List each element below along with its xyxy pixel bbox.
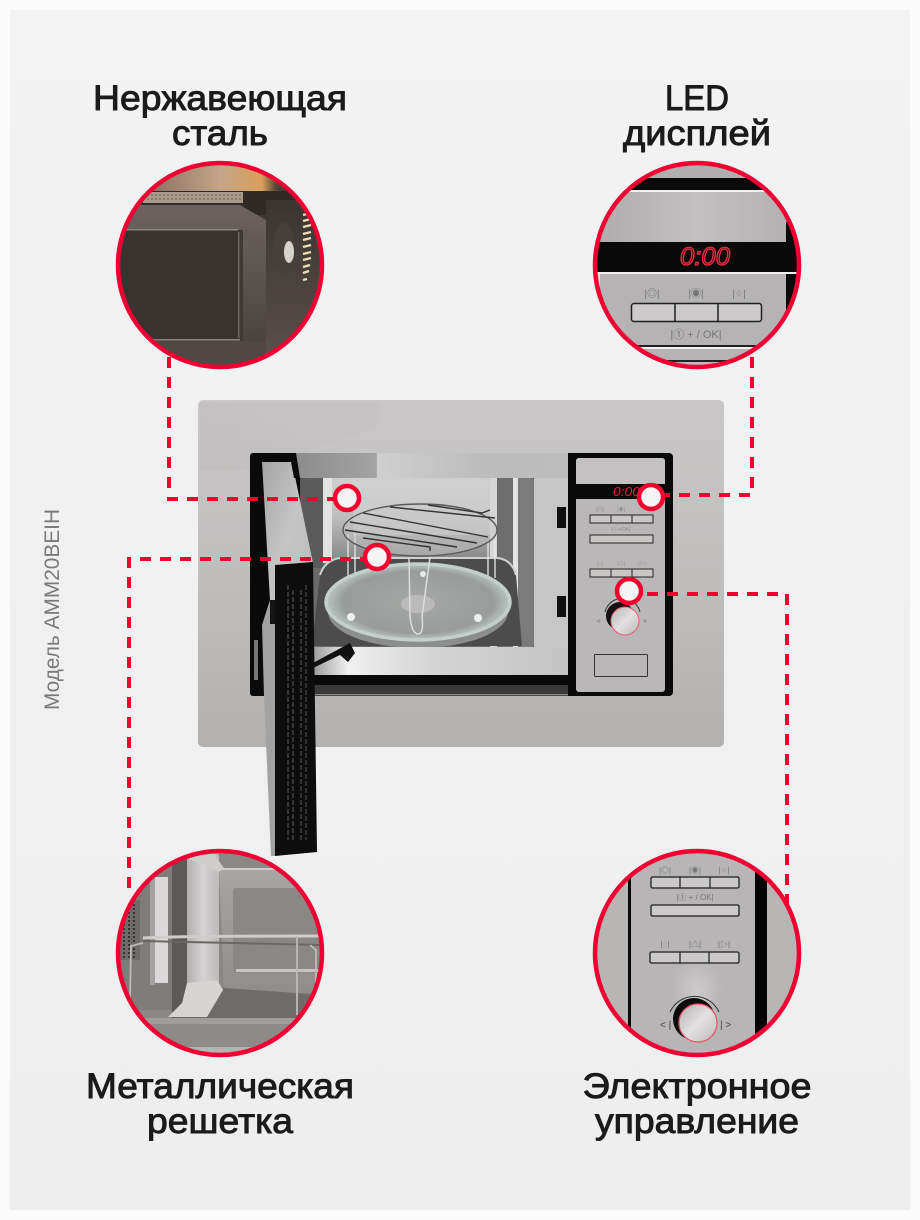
bright side wall <box>187 850 219 985</box>
marker: electronic control <box>617 579 641 603</box>
legends: |▷| <box>718 940 730 949</box>
back wall <box>332 478 494 558</box>
legends: |◉| <box>689 866 701 875</box>
button legends: |① + / OK| <box>670 328 722 341</box>
control buttons: |▷| <box>638 561 646 567</box>
open door <box>250 453 317 856</box>
knob: | > <box>720 1020 731 1031</box>
left wall <box>120 866 172 1010</box>
display digits: 0:00 <box>613 485 640 499</box>
control buttons: |△| <box>617 560 625 567</box>
legends: |① + / OK| <box>676 893 714 902</box>
door seal strip <box>275 562 317 856</box>
callout circle: metal rack <box>115 848 325 1058</box>
heading: stainless steel: сталь <box>172 113 268 153</box>
stainless frame <box>198 400 724 747</box>
heading: electronic control <box>582 1066 812 1141</box>
rack central support <box>409 557 430 634</box>
dial knob: > <box>643 619 647 625</box>
right wall strips <box>490 478 497 647</box>
oven door surround <box>290 453 568 696</box>
marker: LED display <box>639 485 663 509</box>
cavity floor <box>174 988 311 1018</box>
marker: metal rack <box>365 545 389 569</box>
heading: electronic control: Электронное <box>582 1066 812 1106</box>
control buttons: |①+/OK| <box>611 526 631 533</box>
control panel <box>575 458 665 692</box>
legends: |◌| <box>661 940 669 949</box>
tan top edge <box>153 165 283 191</box>
bright perforation <box>303 213 311 280</box>
upper slope <box>127 205 266 341</box>
control buttons: |◉| <box>617 507 625 513</box>
heading: electronic control: управление <box>595 1101 799 1141</box>
control buttons <box>590 507 653 577</box>
leader line: LED display <box>663 357 752 495</box>
knob: < | <box>660 1020 671 1031</box>
left wall strips <box>300 478 323 568</box>
heading: stainless steel: Нержавеющая <box>93 78 347 118</box>
heading: metal rack: решетка <box>147 1101 293 1141</box>
back wall <box>219 870 318 980</box>
heading: LED display: LED <box>665 78 729 118</box>
heading: LED display: дисплей <box>623 113 771 153</box>
knob <box>660 996 731 1042</box>
callout circle: LED display <box>590 160 806 370</box>
rack rear legs <box>348 534 495 582</box>
buttons <box>650 877 739 963</box>
main back wall <box>118 230 240 340</box>
callout circle: electronic control <box>590 848 804 1058</box>
legends: |△| <box>689 940 701 949</box>
callout circle: stainless steel interior <box>115 160 326 370</box>
leader line: stainless steel <box>169 357 335 499</box>
floor <box>312 558 522 646</box>
button legends <box>644 288 746 341</box>
glass plate <box>328 614 508 647</box>
button legends: |◎| <box>644 288 660 300</box>
legends: |⁘| <box>719 866 729 875</box>
heading: LED display <box>623 78 771 153</box>
oven cavity with rack and plate <box>300 478 534 648</box>
buttons row <box>632 303 762 322</box>
black opening <box>250 453 673 696</box>
heading: metal rack <box>86 1066 354 1141</box>
perforation <box>120 900 140 960</box>
legends: |◎| <box>659 866 671 875</box>
wire rack rail <box>130 936 320 1015</box>
button legends: |⁘| <box>732 289 746 300</box>
wire rack <box>343 504 497 556</box>
model label: Модель AMM20BEIH <box>41 509 64 710</box>
leader line: metal rack <box>129 559 365 888</box>
leader line: electronic control <box>641 594 787 905</box>
control buttons: |◎| <box>596 507 604 513</box>
marker: stainless steel <box>335 486 359 510</box>
microwave <box>198 400 724 856</box>
red display digits: 0:00 <box>680 243 730 271</box>
right side wall <box>266 200 319 354</box>
dial knob: < <box>597 619 601 625</box>
legends <box>659 866 730 949</box>
dial knob <box>597 598 647 635</box>
perforated band <box>143 192 243 203</box>
control buttons: |◌| <box>597 561 603 567</box>
door latch <box>313 643 355 668</box>
door release button <box>594 654 648 676</box>
button legends: |◉| <box>688 288 704 300</box>
heading: metal rack: Металлическая <box>86 1066 354 1106</box>
heading: stainless steel <box>93 78 347 153</box>
